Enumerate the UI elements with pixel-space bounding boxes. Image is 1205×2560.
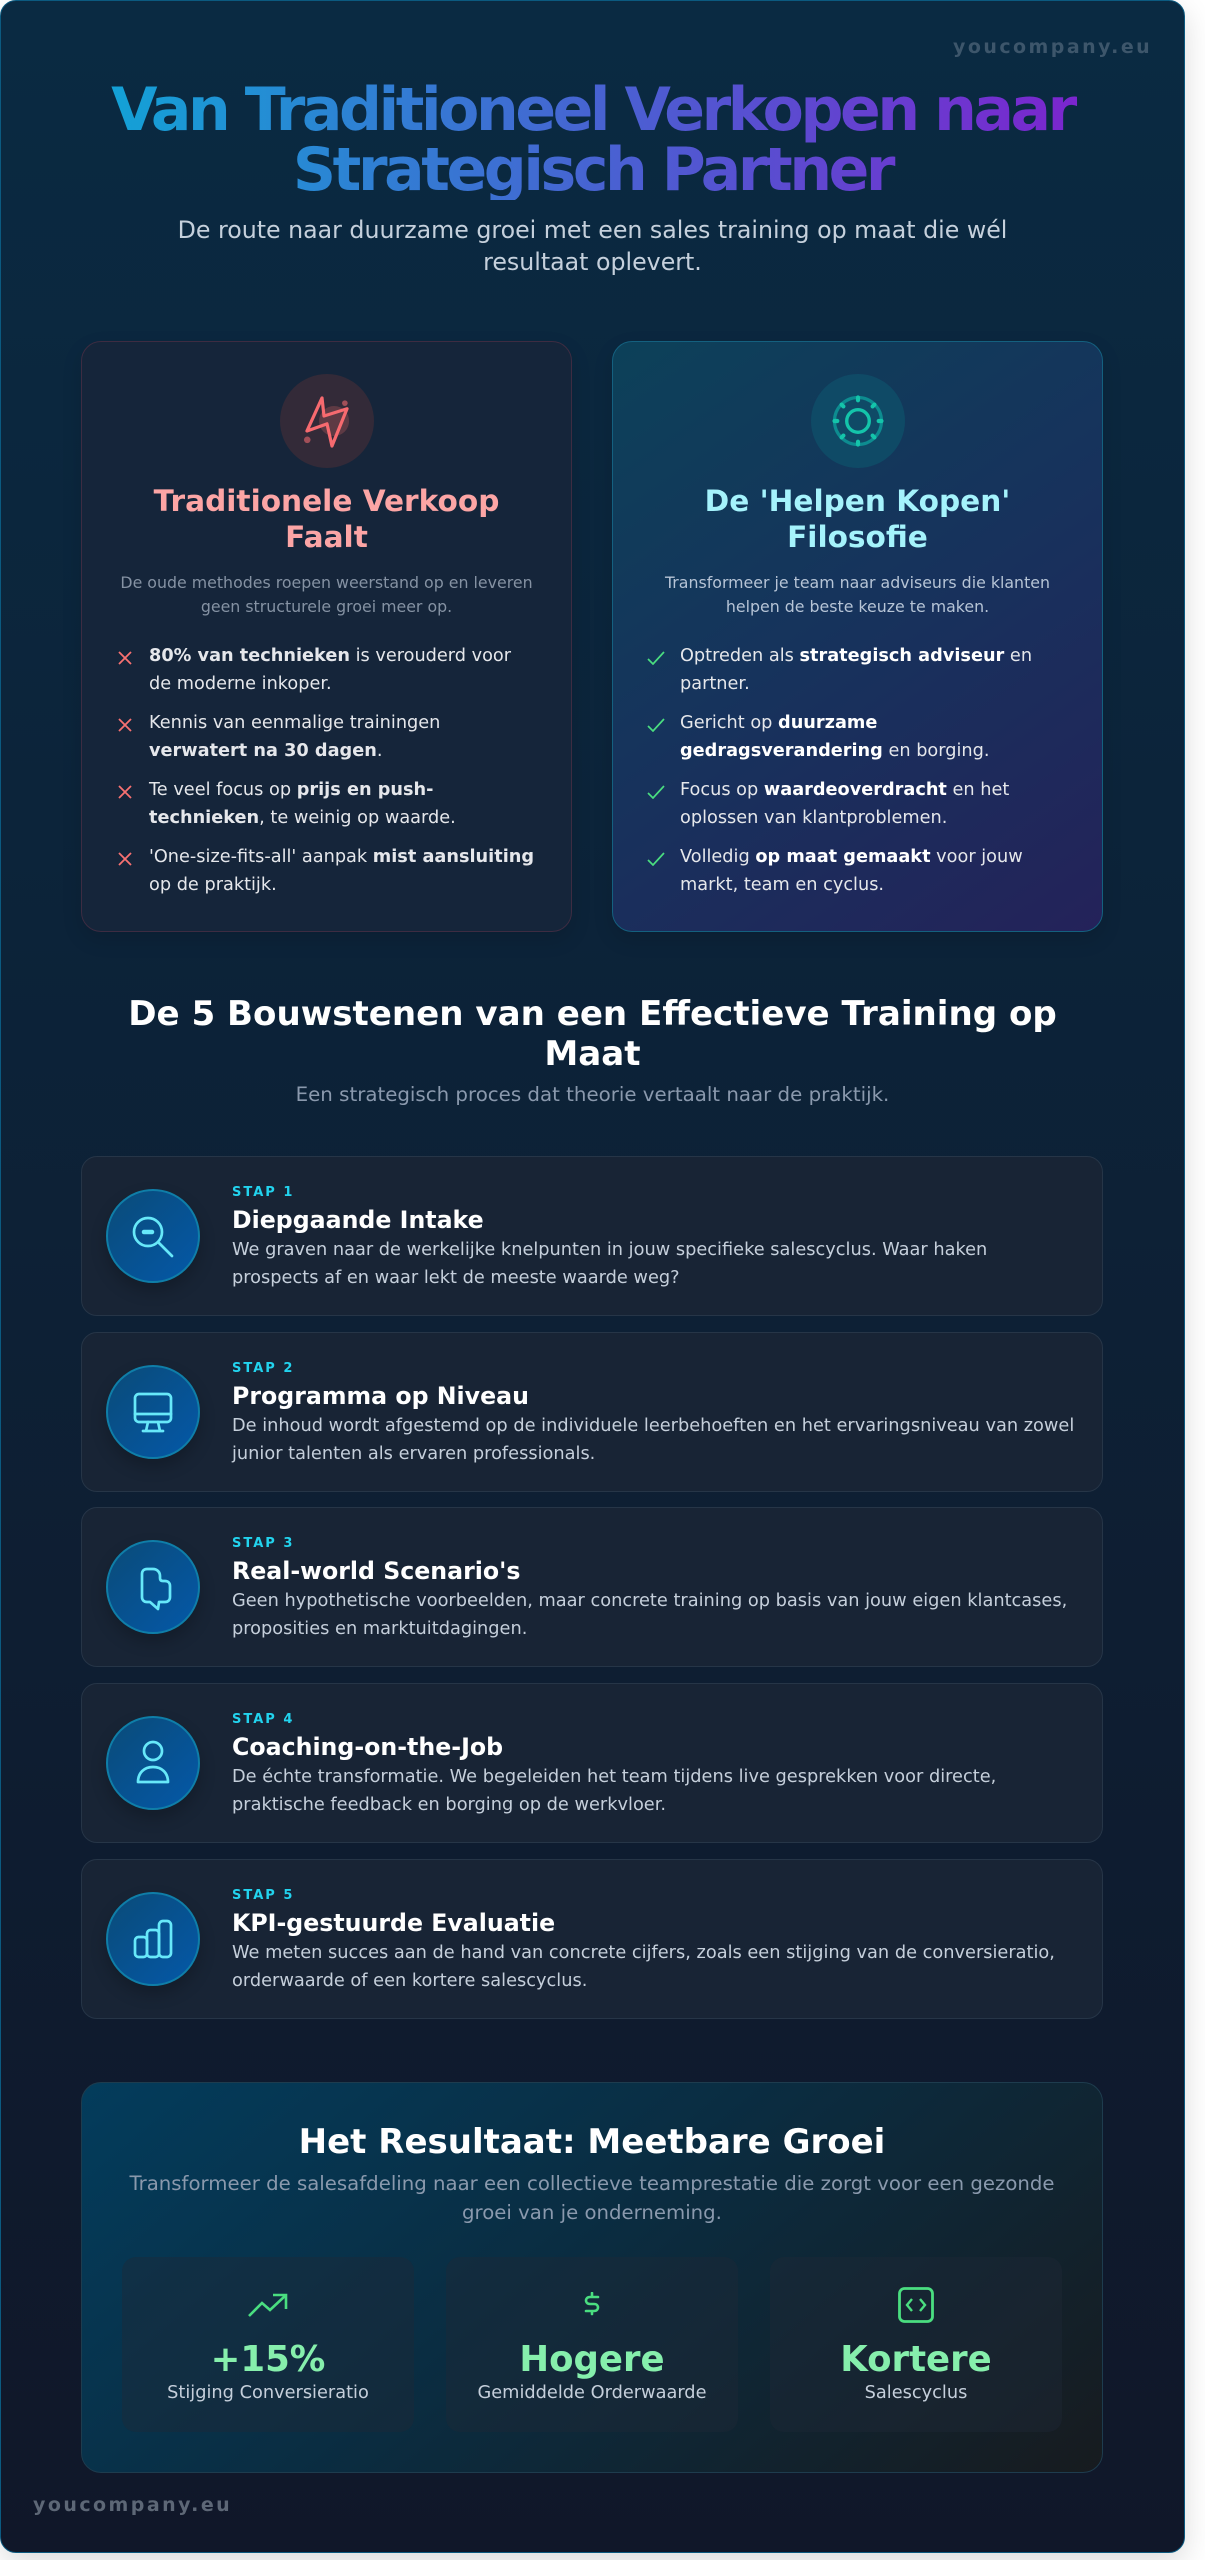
icon: check 1 <box>648 651 665 665</box>
icon: dollar <box>584 2292 600 2316</box>
panel: traditional sales fails <box>81 341 572 932</box>
step 2 text: junior talenten als ervaren professionals. <box>232 1444 595 1464</box>
list: traditional problems <box>118 646 534 894</box>
step 3 label: STAP 3 <box>232 1536 294 1551</box>
title <box>81 80 1104 200</box>
list: philosophy benefits <box>648 646 1032 894</box>
stat card 3 <box>770 2257 1062 2432</box>
panel: helping to buy philosophy <box>612 341 1103 932</box>
step 3 title: Real-world Scenario's <box>232 1557 520 1585</box>
text: philosophy intro: Transformeer je team naar adviseurs die klanten <box>665 573 1050 592</box>
value: Kortere <box>840 2339 992 2380</box>
brand label top: youcompany.eu <box>953 36 1152 58</box>
item 3: technieken, te weinig op waarde. <box>149 808 456 828</box>
item 1: 80% van technieken is verouderd voor <box>149 646 511 666</box>
item 1: de moderne inkoper. <box>149 674 332 694</box>
section subtitle: Een strategisch proces dat theorie vertaalt naar de praktijk. <box>296 1083 889 1106</box>
text: results intro: Transformeer de salesafdeling naar een collectieve teamprestatie die zorgt voor een gezonde <box>129 2172 1055 2195</box>
step 4 text: praktische feedback en borging op de werkvloer. <box>232 1794 666 1814</box>
step 1 text: We graven naar de werkelijke knelpunten in jouw specifieke salescyclus. Waar haken <box>232 1240 987 1260</box>
subtitle: resultaat oplevert. <box>483 248 702 276</box>
icon: code box <box>898 2287 934 2323</box>
item 1: partner. <box>680 674 750 694</box>
step 4 label: STAP 4 <box>232 1712 294 1727</box>
icon: cross 3 <box>118 785 132 799</box>
item 3 <box>680 780 1009 828</box>
item 4: markt, team en cyclus. <box>680 874 884 894</box>
text: traditional intro <box>120 573 533 616</box>
text: traditional intro: De oude methodes roepen weerstand op en leveren <box>120 573 533 592</box>
icon: magnifier <box>106 1189 200 1283</box>
item 3: Te veel focus op prijs en push- <box>149 780 433 800</box>
item 4 <box>680 847 1023 894</box>
subtitle <box>178 216 1007 276</box>
step 3 text: proposities en marktuitdagingen. <box>232 1618 527 1638</box>
step 3 text <box>232 1591 1067 1638</box>
icon: bars <box>106 1892 200 1986</box>
value: Hogere <box>519 2339 665 2380</box>
step 5 text: We meten succes aan de hand van concrete cijfers, zoals een stijging van de conversieratio, <box>232 1943 1055 1963</box>
item 2: Kennis van eenmalige trainingen <box>149 713 440 733</box>
step 2 text: De inhoud wordt afgestemd op de individuele leerbehoeften en het ervaringsniveau van zowel <box>232 1416 1074 1436</box>
text: philosophy intro <box>664 573 1050 616</box>
panel: results <box>81 2082 1103 2473</box>
section heading: building blocks: De 5 Bouwstenen van een Effectieve Training op <box>128 994 1057 1034</box>
item 4 <box>149 847 534 894</box>
icon: target gear <box>811 374 905 468</box>
item 1 <box>149 646 512 694</box>
icon: cross 1 <box>118 651 132 665</box>
item 2 <box>149 713 440 760</box>
item 4: Volledig op maat gemaakt voor jouw <box>680 847 1023 867</box>
item 3: Focus op waardeoverdracht en het <box>680 780 1009 800</box>
step 3 text: Geen hypothetische voorbeelden, maar concrete training op basis van jouw eigen klantcases, <box>232 1591 1067 1611</box>
item 2: gedragsverandering en borging. <box>680 740 989 760</box>
step 2 text <box>232 1416 1074 1464</box>
item 3 <box>148 780 456 828</box>
stat card 2 <box>446 2257 738 2432</box>
icon: trend up <box>248 2294 288 2317</box>
icon: check 4 <box>648 852 665 866</box>
icon: check 2 <box>648 718 665 732</box>
label: Stijging Conversieratio <box>167 2383 369 2403</box>
item 2: verwatert na 30 dagen. <box>149 740 382 760</box>
heading: philosophy: Filosofie <box>787 520 928 554</box>
stat card 1 <box>122 2257 414 2432</box>
heading: philosophy <box>705 484 1010 554</box>
step 2 label: STAP 2 <box>232 1361 294 1376</box>
icon: monitor <box>106 1365 200 1459</box>
heading: traditional: Traditionele Verkoop <box>154 484 499 518</box>
title: Strategisch Partner <box>293 135 892 205</box>
step 4 text <box>232 1767 996 1814</box>
step 4 text: De échte transformatie. We begeleiden het team tijdens live gesprekken voor directe, <box>232 1767 996 1787</box>
text: traditional intro: geen structurele groei meer op. <box>201 597 452 616</box>
icon: person <box>106 1716 200 1810</box>
icon: speech bubble <box>106 1540 200 1634</box>
text: results intro <box>129 2172 1055 2224</box>
step 4 title: Coaching-on-the-Job <box>232 1733 503 1761</box>
step 1 title: Diepgaande Intake <box>232 1206 484 1234</box>
icon: check 3 <box>648 785 665 799</box>
step 1 card <box>81 1156 1103 1316</box>
heading: traditional <box>154 484 499 554</box>
step 1 text <box>232 1240 987 1288</box>
text: results intro: groei van je onderneming. <box>462 2201 722 2224</box>
icon: cross 2 <box>118 718 132 732</box>
label: Gemiddelde Orderwaarde <box>478 2383 706 2403</box>
icon: cross 4 <box>118 852 132 866</box>
brand label bottom: youcompany.eu <box>33 2494 232 2516</box>
heading: traditional: Faalt <box>285 520 368 554</box>
item 1 <box>680 646 1032 694</box>
value: +15% <box>211 2339 325 2380</box>
item 4: 'One-size-fits-all' aanpak mist aansluiting <box>149 847 534 867</box>
step 2 title: Programma op Niveau <box>232 1382 529 1410</box>
step 5 text <box>232 1943 1055 1990</box>
step 5 text: orderwaarde of een kortere salescyclus. <box>232 1970 587 1990</box>
title: Van Traditioneel Verkopen naar <box>111 75 1074 145</box>
item 2: Gericht op duurzame <box>680 713 877 733</box>
section heading: building blocks <box>128 994 1057 1074</box>
item 3: oplossen van klantproblemen. <box>680 808 947 828</box>
step 5 label: STAP 5 <box>232 1888 294 1903</box>
step 5 title: KPI-gestuurde Evaluatie <box>232 1909 555 1937</box>
step 5 card <box>81 1859 1103 2019</box>
icon: broken lightning <box>280 374 374 468</box>
item 2 <box>680 713 989 760</box>
section heading: building blocks: Maat <box>544 1034 641 1074</box>
step 1 label: STAP 1 <box>232 1185 294 1200</box>
heading: results: Het Resultaat: Meetbare Groei <box>299 2122 885 2162</box>
item 4: op de praktijk. <box>149 874 277 894</box>
step 4 card <box>81 1683 1103 1843</box>
step 3 card <box>81 1507 1103 1667</box>
label: Salescyclus <box>865 2383 967 2403</box>
subtitle: De route naar duurzame groei met een sales training op maat die wél <box>178 216 1007 244</box>
step 1 text: prospects af en waar lekt de meeste waarde weg? <box>232 1268 680 1288</box>
text: philosophy intro: helpen de beste keuze te maken. <box>726 597 989 616</box>
item 1: Optreden als strategisch adviseur en <box>680 646 1032 666</box>
step 2 card <box>81 1332 1103 1492</box>
heading: philosophy: De 'Helpen Kopen' <box>705 484 1010 518</box>
